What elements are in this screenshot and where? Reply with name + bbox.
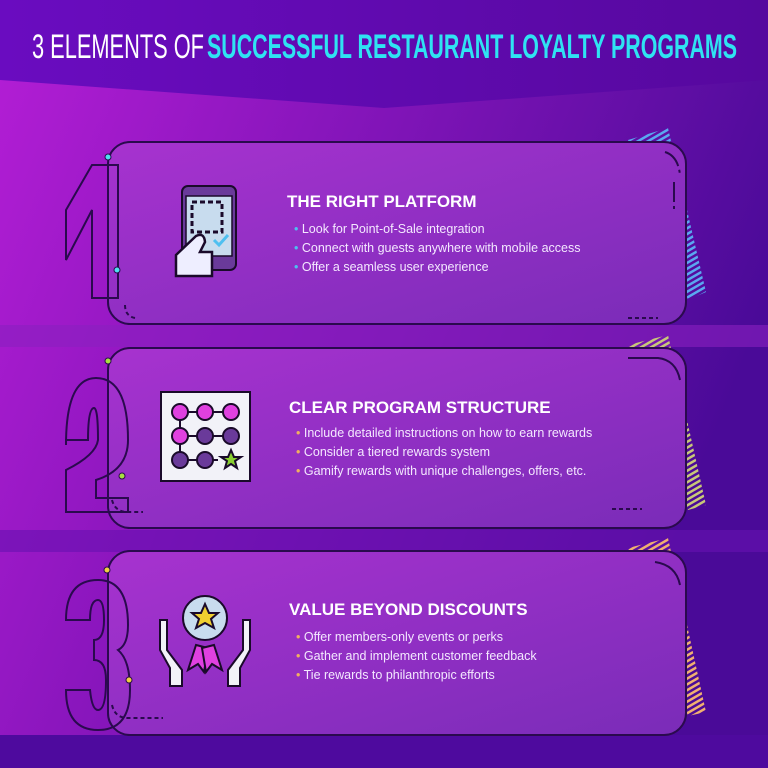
header band xyxy=(0,0,768,108)
title: 3 ELEMENTS OF xyxy=(32,28,204,66)
icon: grid xyxy=(161,392,250,481)
panel: 2 clear program structure: • Gamify rewards with unique challenges, offers, etc. xyxy=(296,464,586,478)
panel: 1 the right platform xyxy=(66,128,706,324)
bullets: • Look for Point-of-Sale integration xyxy=(294,222,485,236)
panel: 3 value beyond discounts: • Gather and implement customer feedback xyxy=(296,649,537,663)
icon: phone qr xyxy=(176,186,236,276)
panel: 3 value beyond discounts: VALUE BEYOND DISCOUNTS xyxy=(289,600,528,619)
panel: 2 clear program structure: • Consider a tiered rewards system xyxy=(296,445,490,459)
icon: award hands xyxy=(160,596,250,686)
bullets xyxy=(294,222,580,274)
number 3 xyxy=(66,567,132,730)
panel: 3 value beyond discounts: • Tie rewards to philanthropic efforts xyxy=(296,668,495,682)
number 2 xyxy=(66,358,128,512)
number 1 xyxy=(66,154,120,298)
panel: 2 clear program structure xyxy=(66,335,706,528)
panel: 3 value beyond discounts xyxy=(66,538,706,735)
panel: 3 value beyond discounts: • Offer members-only events or perks xyxy=(296,630,503,644)
bullets: • Offer a seamless user experience xyxy=(294,260,489,274)
bullets: • Connect with guests anywhere with mobile access xyxy=(294,241,580,255)
panel: 2 clear program structure: CLEAR PROGRAM STRUCTURE xyxy=(289,398,551,417)
panel: 2 clear program structure: • Include detailed instructions on how to earn rewards xyxy=(296,426,592,440)
heading: THE RIGHT PLATFORM xyxy=(287,192,476,211)
